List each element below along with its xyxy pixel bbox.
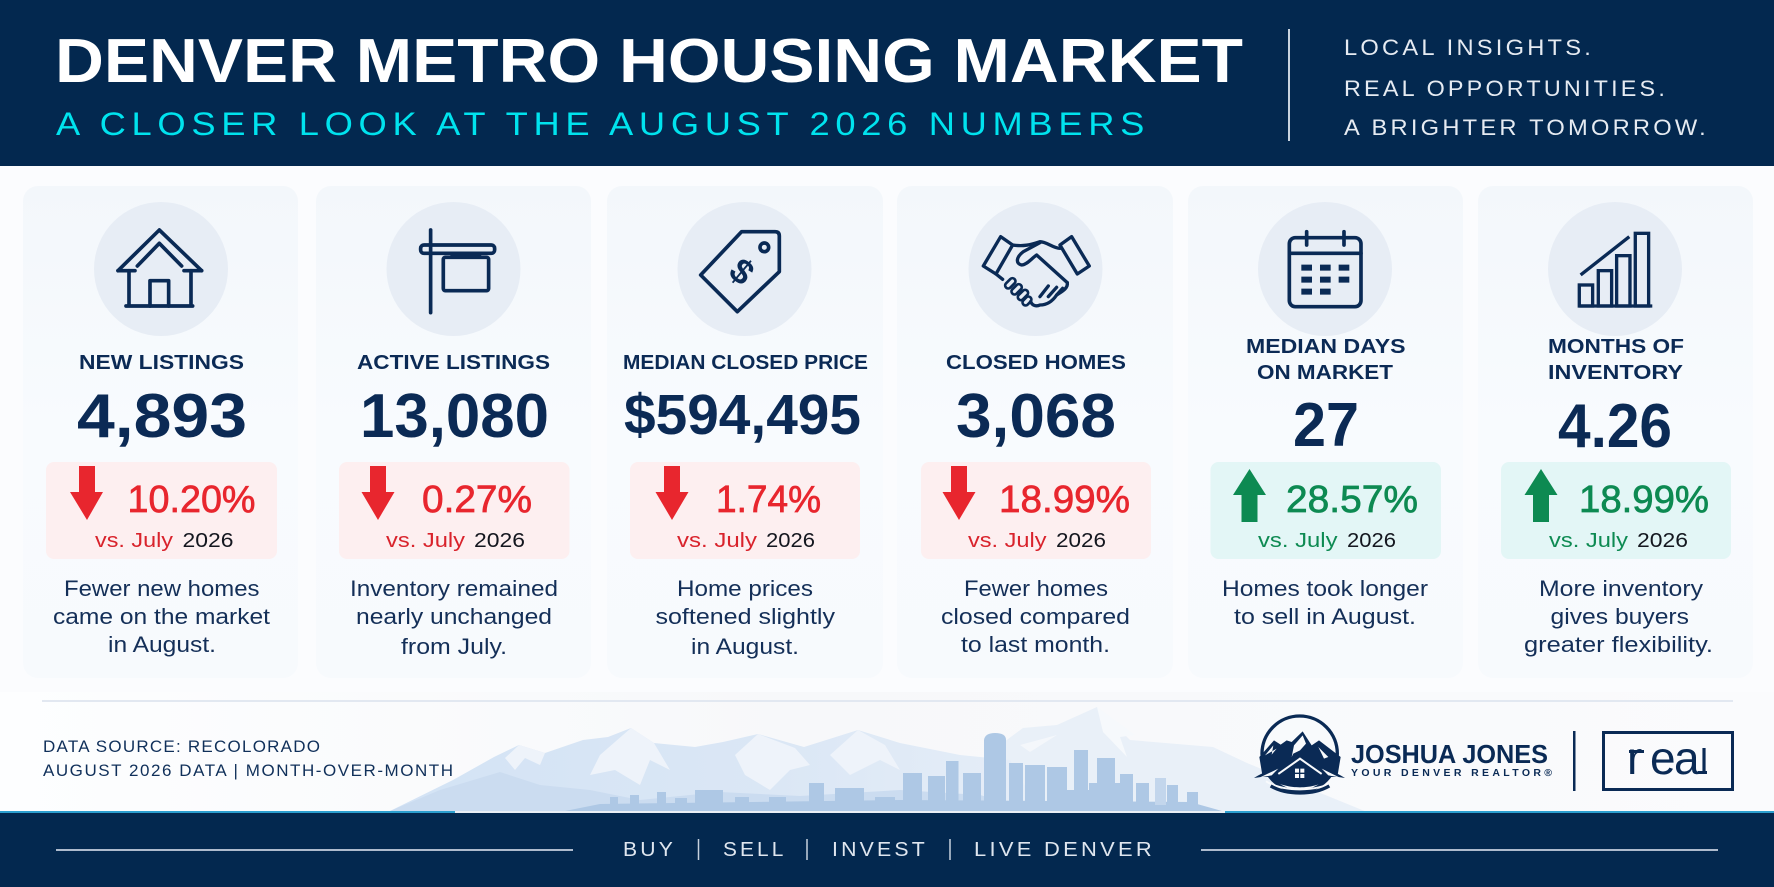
- description: [350, 576, 558, 659]
- description: Fewer homes: [964, 576, 1108, 601]
- description: in August.: [691, 634, 799, 659]
- change badge: 28.57%: [1286, 479, 1418, 521]
- icon: hanging sign: [421, 230, 495, 313]
- change badge: 2026: [1637, 530, 1688, 552]
- description: Home prices: [677, 576, 813, 601]
- data source note: DATA SOURCE: RECOLORADO: [43, 737, 320, 756]
- value: 13,080: [360, 382, 549, 451]
- description: [1524, 576, 1713, 657]
- illustration: mountains and skyline: [390, 707, 1367, 812]
- label: NEW LISTINGS: [79, 352, 244, 374]
- icon: handshake: [983, 237, 1089, 307]
- change badge: 2026: [1056, 530, 1106, 552]
- description: [941, 576, 1130, 657]
- tagline: REAL OPPORTUNITIES.: [1344, 76, 1668, 101]
- change badge: vs. July: [1549, 530, 1628, 552]
- logo: real: rea: [1627, 732, 1700, 784]
- label: ON MARKET: [1257, 362, 1393, 384]
- change badge: 18.99%: [999, 479, 1130, 521]
- change badge: 2026: [1347, 530, 1396, 552]
- description: from July.: [401, 634, 507, 659]
- label: ACTIVE LISTINGS: [357, 352, 550, 374]
- footer band: [0, 811, 1774, 887]
- description: Homes took longer: [1222, 576, 1428, 601]
- icon: price tag: [701, 232, 779, 312]
- value: 27: [1293, 391, 1359, 460]
- description: More inventory: [1539, 576, 1703, 601]
- panel: median closed price: [607, 186, 883, 678]
- description: nearly unchanged: [356, 604, 552, 629]
- value: 4.26: [1558, 392, 1672, 461]
- panel: months of inventory: [1478, 186, 1753, 678]
- label: INVENTORY: [1548, 362, 1684, 384]
- footer services: SELL: [723, 839, 786, 861]
- name: JOSHUA JONES: [1351, 739, 1548, 769]
- value: $594,495: [624, 383, 861, 447]
- change badge: [46, 462, 277, 559]
- subtitle: A CLOSER LOOK AT THE AUGUST 2026 NUMBERS: [56, 106, 1150, 142]
- icon: price tag: $: [722, 251, 762, 293]
- label: [1548, 336, 1684, 384]
- description: in August.: [108, 632, 216, 657]
- logo: real: [1604, 732, 1732, 790]
- change badge: 2026: [766, 530, 815, 552]
- description: Fewer new homes: [64, 576, 260, 601]
- description: closed compared: [941, 604, 1130, 629]
- label: MEDIAN DAYS: [1246, 336, 1406, 358]
- footer services: LIVE DENVER: [974, 839, 1155, 861]
- label: MEDIAN CLOSED PRICE: [623, 352, 868, 374]
- logo: Joshua Jones: [1254, 716, 1552, 793]
- change badge: 0.27%: [422, 479, 532, 521]
- change badge: vs. July: [968, 530, 1046, 552]
- icon: calendar: [1289, 232, 1361, 307]
- tagline: A BRIGHTER TOMORROW.: [1344, 115, 1709, 140]
- panel: median days on market: [1188, 186, 1463, 678]
- title: DENVER METRO HOUSING MARKET: [55, 27, 1243, 96]
- arrow down: [942, 466, 976, 520]
- description: [1222, 576, 1428, 629]
- icon: rising bar chart: [1579, 233, 1652, 306]
- change badge: [339, 462, 570, 559]
- panel: closed homes: [897, 186, 1173, 678]
- arrow down: [362, 466, 394, 520]
- icon: house: [118, 230, 202, 306]
- header band: [0, 0, 1774, 166]
- value: 4,893: [77, 382, 247, 451]
- description: to last month.: [961, 632, 1110, 657]
- emblem: [1254, 716, 1345, 793]
- panel: new listings: [23, 186, 298, 678]
- label: MONTHS OF: [1548, 336, 1684, 358]
- data source note: AUGUST 2026 DATA | MONTH-OVER-MONTH: [43, 761, 453, 780]
- description: [53, 576, 270, 657]
- data source note: [43, 737, 453, 780]
- change badge: 2026: [182, 530, 234, 552]
- change badge: 10.20%: [128, 479, 256, 521]
- change badge: vs. July: [1258, 530, 1338, 552]
- change badge: vs. July: [677, 530, 757, 552]
- label: [1246, 336, 1406, 384]
- description: [656, 576, 835, 659]
- arrow up: [1524, 469, 1558, 522]
- footer services: [623, 839, 1155, 861]
- change badge: 2026: [474, 530, 525, 552]
- logo: real: l: [1700, 741, 1708, 782]
- change badge: vs. July: [95, 530, 173, 552]
- change badge: [1501, 462, 1731, 559]
- change badge: [630, 462, 860, 559]
- change badge: [1210, 462, 1441, 559]
- value: 3,068: [956, 382, 1116, 451]
- change badge: 18.99%: [1579, 479, 1709, 521]
- description: to sell in August.: [1234, 604, 1416, 629]
- arrow down: [656, 466, 688, 520]
- realtor line: YOUR DENVER REALTOR®: [1351, 767, 1552, 779]
- label: CLOSED HOMES: [946, 352, 1126, 374]
- arrow up: [1233, 469, 1266, 522]
- description: Inventory remained: [350, 576, 558, 601]
- footer services: BUY: [623, 839, 676, 861]
- arrow down: [70, 466, 103, 520]
- change badge: vs. July: [386, 530, 465, 552]
- description: gives buyers: [1550, 604, 1689, 629]
- tagline: [1344, 35, 1709, 140]
- change badge: [921, 462, 1151, 559]
- panel: active listings: [316, 186, 591, 678]
- tagline: LOCAL INSIGHTS.: [1344, 35, 1594, 60]
- footer services: INVEST: [832, 839, 928, 861]
- description: came on the market: [53, 604, 270, 629]
- description: softened slightly: [656, 604, 835, 629]
- description: greater flexibility.: [1524, 632, 1713, 657]
- change badge: 1.74%: [716, 479, 821, 521]
